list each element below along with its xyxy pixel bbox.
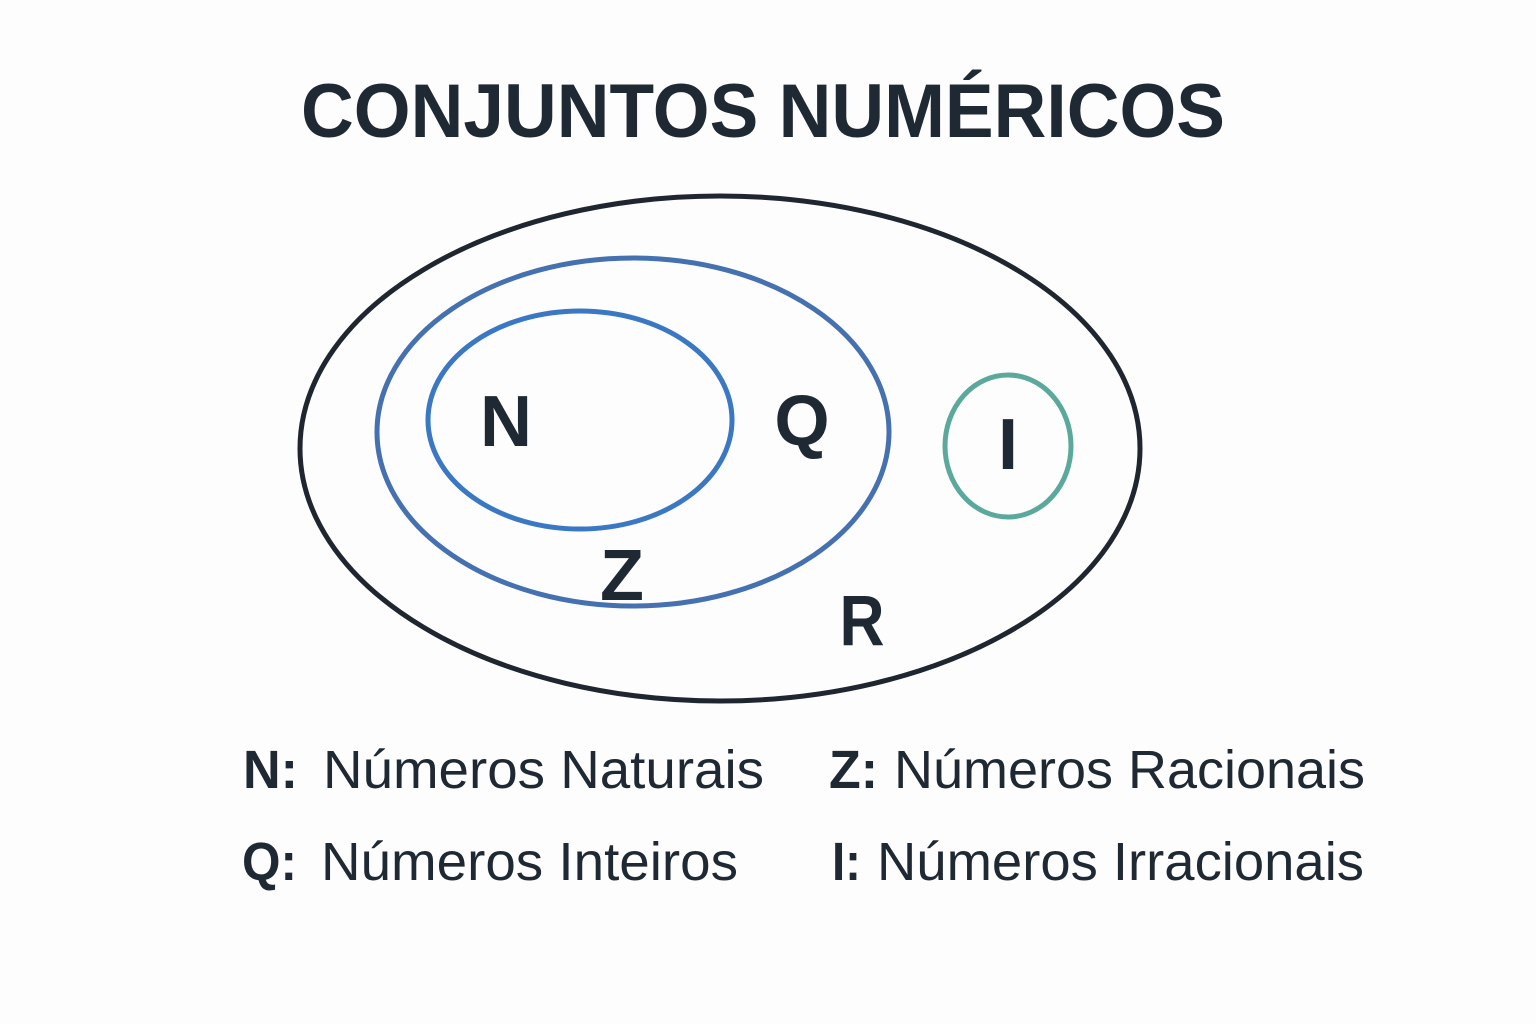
legend I: Números Irracionais bbox=[877, 832, 1364, 892]
label Q: Q bbox=[774, 382, 830, 461]
set Z/Q ellipse bbox=[377, 258, 889, 606]
legend N: N: bbox=[243, 740, 298, 800]
venn diagram bbox=[300, 196, 1140, 701]
legend N: Números Naturais bbox=[323, 740, 764, 800]
set R outer ellipse bbox=[300, 196, 1140, 701]
set I ellipse bbox=[945, 375, 1071, 517]
legend Q: Números Inteiros bbox=[321, 832, 738, 892]
legend Q: Q: bbox=[242, 832, 297, 892]
label R: R bbox=[840, 582, 884, 661]
legend Z: Números Racionais bbox=[894, 740, 1365, 800]
label I: I bbox=[998, 405, 1018, 485]
legend bbox=[242, 740, 1365, 892]
label N: N bbox=[480, 382, 532, 462]
title: CONJUNTOS NUMÉRICOS bbox=[301, 69, 1225, 154]
legend Z: Z: bbox=[829, 740, 878, 800]
set N ellipse bbox=[428, 311, 732, 529]
label Z: Z bbox=[600, 536, 644, 616]
legend I: I: bbox=[832, 832, 861, 892]
